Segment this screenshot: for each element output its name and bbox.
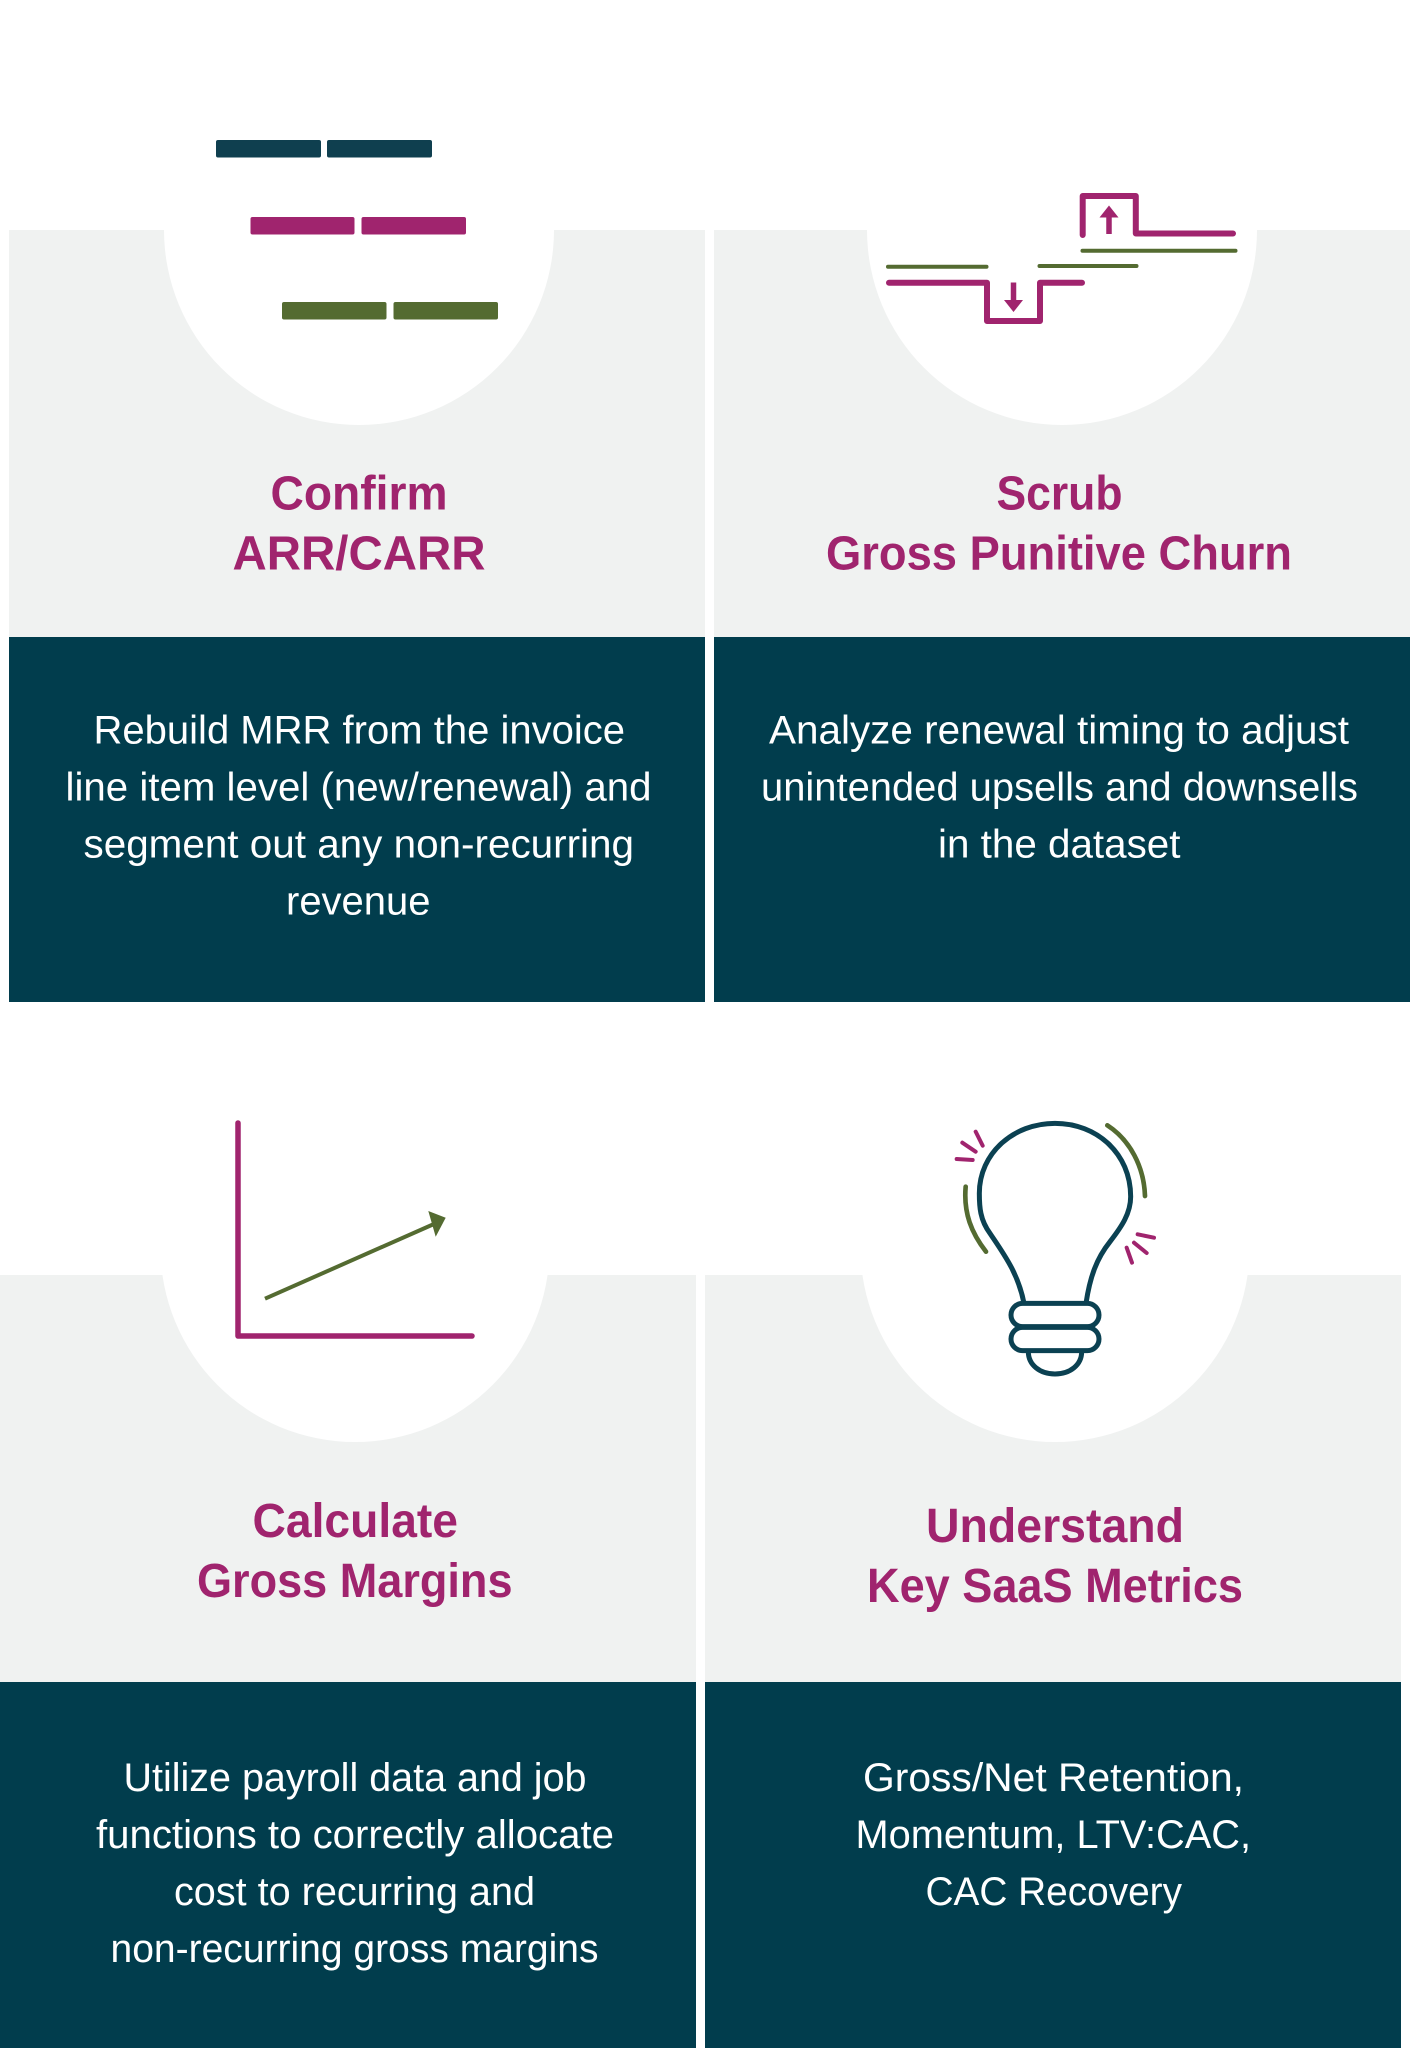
heading: Calculate: [252, 1495, 458, 1548]
description text: line item level (new/renewal) and: [66, 766, 652, 810]
description background: [714, 637, 1410, 1002]
description text: Momentum, LTV:CAC,: [856, 1813, 1251, 1857]
heading: Gross Margins: [197, 1555, 512, 1608]
heading: Gross Punitive Churn: [826, 528, 1292, 580]
description text: [66, 708, 652, 924]
description text: Utilize payroll data and job: [124, 1756, 586, 1800]
description text: non-recurring gross margins: [110, 1927, 598, 1971]
description text: Analyze renewal timing to adjust: [769, 708, 1349, 752]
description text: revenue: [286, 880, 430, 924]
icon: growth chart: [238, 1123, 472, 1336]
description text: cost to recurring and: [174, 1870, 535, 1914]
heading: Confirm: [270, 468, 448, 520]
heading: ARR/CARR: [232, 528, 486, 580]
icon: upsell and downsell steps: [888, 196, 1236, 321]
description text: Gross/Net Retention,: [863, 1756, 1244, 1800]
icon backdrop circle: [160, 1053, 550, 1442]
description background: [705, 1682, 1401, 2048]
description text: CAC Recovery: [926, 1870, 1182, 1914]
description text: [856, 1756, 1251, 1914]
icon backdrop circle: [867, 35, 1257, 425]
description background: [0, 1682, 696, 2048]
heading: Scrub: [996, 468, 1122, 520]
heading: [232, 468, 486, 580]
heading: Key SaaS Metrics: [867, 1560, 1243, 1613]
icon: staggered bars: [216, 140, 498, 320]
description text: [761, 708, 1358, 866]
icon: light bulb: [957, 1123, 1154, 1374]
heading: [197, 1495, 512, 1608]
panel background: [9, 230, 705, 637]
icon backdrop circle: [860, 1053, 1250, 1442]
heading: Understand: [926, 1500, 1184, 1553]
description background: [9, 637, 705, 1002]
icon backdrop circle: [164, 35, 554, 425]
heading: [867, 1500, 1243, 1613]
description text: functions to correctly allocate: [96, 1813, 614, 1857]
description text: Rebuild MRR from the invoice: [94, 708, 625, 752]
heading: [826, 468, 1292, 580]
panel background: [705, 1275, 1401, 1682]
panel: Calculate Gross Margins: [0, 1053, 696, 2048]
description text: [96, 1756, 614, 1971]
panel: Understand Key SaaS Metrics: [705, 1053, 1401, 2048]
panel background: [714, 230, 1410, 637]
panel: Confirm ARR/CARR: [9, 35, 705, 1002]
panel: Scrub Gross Punitive Churn: [714, 35, 1410, 1002]
description text: unintended upsells and downsells: [761, 766, 1358, 810]
panel background: [0, 1275, 696, 1682]
description text: segment out any non-recurring: [84, 822, 634, 866]
description text: in the dataset: [938, 822, 1180, 866]
